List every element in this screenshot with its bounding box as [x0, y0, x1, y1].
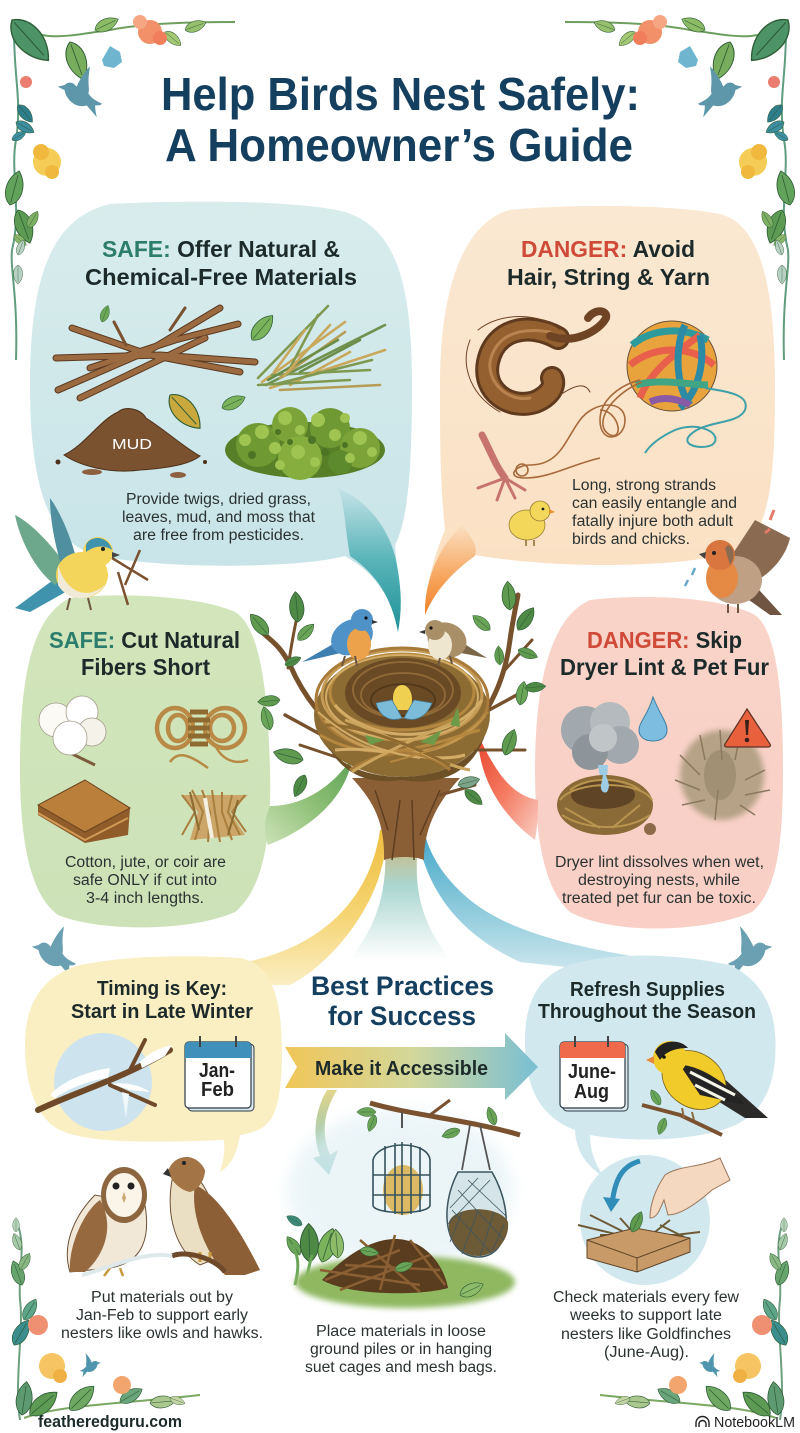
panel background with tail — [525, 956, 776, 1178]
body text: are free from pesticides. — [133, 527, 304, 544]
body text: Jan-Feb to support early — [76, 1307, 248, 1324]
scene glow — [288, 1110, 512, 1270]
floral corner: top left — [2, 11, 235, 360]
icon: calendar June-Aug — [560, 1036, 628, 1111]
body text — [305, 1323, 497, 1376]
panel: safe natural materials — [30, 202, 412, 632]
center illustration: tree and nest — [246, 581, 546, 860]
icon: green leaf — [246, 311, 278, 345]
arrow: make it accessible — [285, 1033, 538, 1100]
body text: Check materials every few — [553, 1289, 740, 1306]
leaves — [246, 581, 546, 808]
arrow label: Make it Accessible — [315, 1058, 488, 1080]
icon: suet cage — [373, 1112, 430, 1215]
icon: coir mat — [38, 780, 130, 843]
icon: teal yarn tail — [645, 388, 746, 453]
connector: blue stream to refresh panel — [416, 830, 680, 975]
icon: water drop — [639, 697, 667, 741]
icon: twigs — [56, 308, 255, 398]
panel: danger lint and pet fur — [478, 597, 783, 928]
icon: tangled claw — [478, 435, 528, 500]
body text: Dryer lint dissolves when wet, — [555, 854, 764, 871]
icon: calendar June-Aug: June- — [568, 1061, 616, 1083]
heading: Start in Late Winter — [71, 1001, 253, 1023]
panel: safe cut natural fibers: Fibers Short — [81, 654, 210, 680]
body text: treated pet fur can be toxic. — [562, 890, 756, 907]
panel background — [535, 597, 783, 928]
tail to nest — [265, 758, 352, 845]
body text: destroying nests, while — [578, 872, 740, 889]
panel: safe natural materials: Chemical-Free Materials — [85, 264, 357, 290]
icon: bird silhouette middle right — [728, 926, 772, 977]
panel background with tail — [25, 956, 282, 1172]
body text: nesters like Goldfinches — [561, 1326, 731, 1343]
panel: danger lint and pet fur: Dryer Lint & Pet Fur — [560, 654, 769, 680]
tree trunk and branches — [246, 581, 546, 860]
panel: danger hair, string, yarn — [425, 206, 775, 615]
icon: bird silhouette top left — [58, 66, 102, 117]
icon: distressed robin (right) — [685, 510, 790, 615]
icon: fiber bundle — [182, 790, 248, 842]
panel: timing is key — [25, 956, 282, 1342]
icon: mesh bag — [447, 1125, 508, 1257]
icon: refill box with hand — [578, 1155, 730, 1285]
body text — [61, 1289, 263, 1342]
title — [161, 68, 640, 171]
title: Help Birds Nest Safely: — [161, 68, 640, 120]
icon: goldfinch — [642, 1038, 768, 1136]
icon: hair — [466, 311, 606, 412]
icon: yellow leaf — [162, 388, 208, 435]
icon: calendar June-Aug: Aug — [574, 1081, 609, 1103]
icon: ground pile — [295, 1235, 515, 1308]
title: A Homeowner’s Guide — [165, 119, 633, 171]
icon: pet fur — [675, 730, 770, 820]
body text — [572, 477, 737, 548]
heading — [311, 971, 494, 1031]
icon: dissolving nest — [557, 770, 656, 835]
icon: hawk — [82, 1157, 260, 1275]
connector: yellow stream to timing panel — [150, 830, 388, 985]
panel background with tail — [425, 206, 775, 615]
body text: (June-Aug). — [604, 1344, 689, 1361]
body text: Cotton, jute, or coir are — [65, 854, 226, 871]
icon: bird silhouette top right — [698, 66, 742, 117]
connector: center stream — [350, 845, 450, 960]
body text: can easily entangle and — [572, 495, 737, 512]
icon: cotton boll — [39, 696, 106, 765]
heading: SAFE: Offer Natural & — [102, 236, 340, 262]
heading: Timing is Key: — [97, 978, 227, 1000]
icon: moss — [225, 407, 385, 480]
body text: nesters like owls and hawks. — [61, 1325, 263, 1342]
body text: Place materials in loose — [316, 1323, 486, 1340]
floral corner: top right — [565, 11, 798, 360]
icon: plants — [283, 1213, 345, 1288]
heading — [71, 978, 253, 1023]
icon: dried grass — [258, 306, 385, 390]
tail accent — [338, 488, 401, 632]
body text — [122, 491, 316, 544]
body text — [555, 854, 764, 907]
panel: danger hair, string, yarn: Hair, String & Yarn — [507, 264, 710, 290]
heading: Throughout the Season — [538, 1001, 756, 1023]
icon: branch — [357, 1100, 520, 1141]
icon: warning triangle — [725, 709, 770, 747]
icon: lint cloud — [561, 702, 639, 795]
body text: leaves, mud, and moss that — [122, 509, 316, 526]
tail accent — [425, 525, 476, 615]
body text: 3-4 inch lengths. — [86, 890, 204, 907]
heading: for Success — [328, 1001, 476, 1031]
heading: Refresh Supplies — [570, 979, 725, 1001]
body text: ground piles or in hanging — [310, 1341, 492, 1358]
icon: small leaf — [98, 304, 112, 323]
body text — [65, 854, 226, 907]
icon: small green leaf — [219, 392, 248, 413]
heading: DANGER: Avoid — [521, 236, 695, 262]
icon: calendar Jan-Feb: Jan- — [199, 1060, 235, 1082]
panel background with tail — [30, 202, 412, 632]
icon: tangled string — [514, 380, 642, 478]
body text: weeks to support late — [569, 1307, 722, 1324]
heading: DANGER: Skip — [587, 627, 742, 653]
icon: owl — [67, 1167, 147, 1276]
body text: birds and chicks. — [572, 531, 690, 548]
nest woven — [314, 648, 490, 782]
icon: jute rope — [157, 708, 248, 768]
tail to nest — [478, 735, 538, 840]
footer: NotebookLM mark: NotebookLM — [714, 1414, 795, 1431]
footer: website: featheredguru.com — [38, 1412, 182, 1431]
body text: safe ONLY if cut into — [73, 872, 217, 889]
body text — [553, 1289, 740, 1361]
icon: yarn ball — [627, 321, 717, 411]
body text: fatally injure both adult — [572, 513, 734, 530]
icon: mud pile: MUD — [112, 436, 152, 453]
icon: mud pile — [56, 409, 207, 478]
bluebird — [302, 609, 380, 666]
icon: bird silhouette middle left — [32, 926, 76, 977]
icon: snowy branch — [38, 1033, 172, 1131]
body text: Put materials out by — [91, 1289, 233, 1306]
icon: chick — [509, 501, 555, 546]
heading — [538, 979, 756, 1023]
floral corner: bottom left — [8, 1218, 200, 1421]
body text: Long, strong strands — [572, 477, 716, 494]
body text: suet cages and mesh bags. — [305, 1359, 497, 1376]
heading: Best Practices — [311, 971, 494, 1001]
icon: calendar Jan-Feb — [185, 1036, 254, 1111]
panel: refresh supplies — [525, 956, 776, 1361]
icon: songbird carrying twig (left) — [15, 498, 148, 612]
heading: SAFE: Cut Natural — [49, 627, 240, 653]
panel: safe cut natural fibers — [20, 595, 352, 927]
arrow: curved down to pile — [313, 1090, 338, 1175]
panel background — [20, 595, 270, 927]
body text: Provide twigs, dried grass, — [126, 491, 311, 508]
floral corner: bottom right — [600, 1218, 792, 1421]
icon: calendar Jan-Feb: Feb — [201, 1079, 234, 1101]
panel: best practices — [283, 971, 538, 1376]
brown bird — [419, 616, 487, 666]
